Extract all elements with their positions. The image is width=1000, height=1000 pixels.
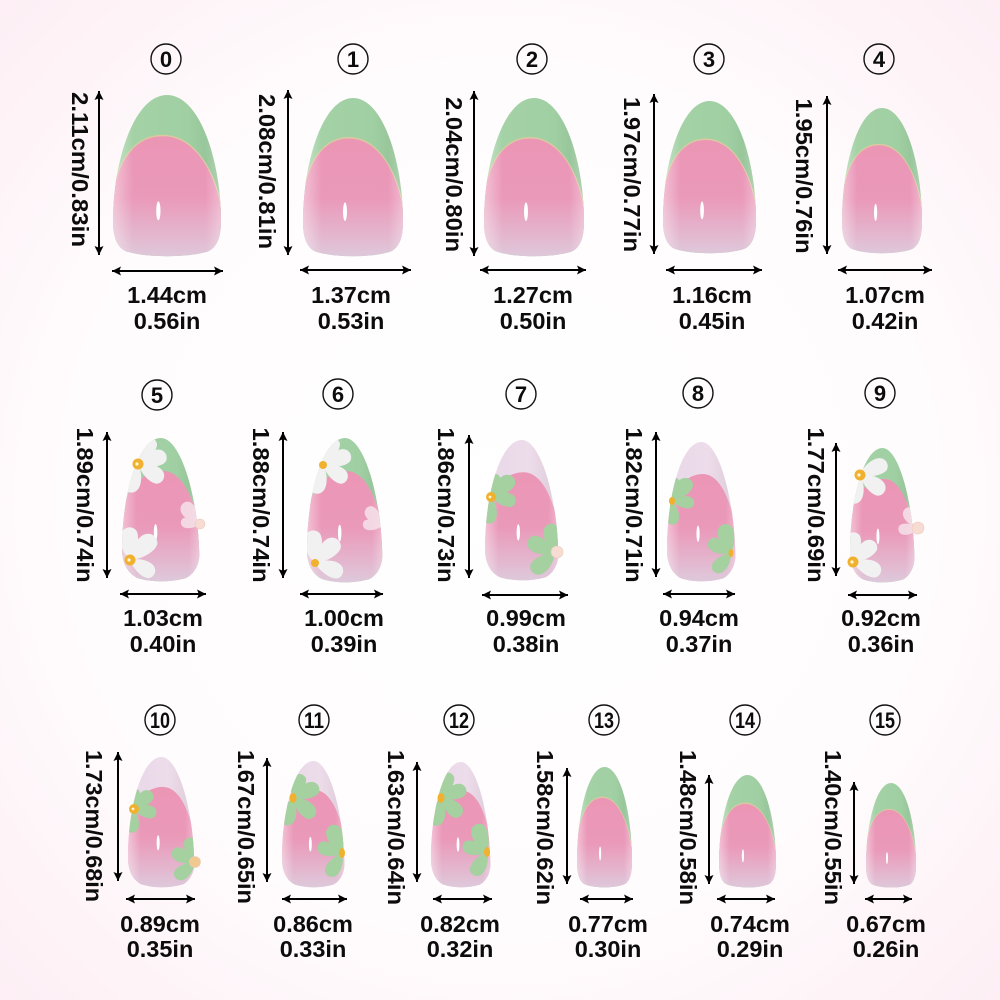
- size 2 number badge: [517, 44, 547, 74]
- size 13 height arrow: [566, 768, 568, 884]
- size 3: [619, 44, 762, 334]
- size 12 height arrow: [416, 762, 418, 882]
- size 14 height arrow: [708, 775, 710, 884]
- size 6 width label: 1.00cm: [304, 605, 384, 631]
- size 14 number badge: 14: [735, 708, 756, 733]
- size 11 width arrow: [282, 898, 347, 900]
- size 5 width label: [123, 605, 203, 657]
- size 9 nail with white flowers: [848, 448, 924, 582]
- size 10 height label: 1.73cm/0.68in: [81, 750, 107, 902]
- size 4 number badge: [864, 44, 894, 74]
- size 13 width arrow: [580, 898, 633, 900]
- size 2 width label: 0.50in: [500, 308, 566, 334]
- size 12: [383, 705, 500, 962]
- size 0: [67, 44, 226, 334]
- size 3 width label: 0.45in: [679, 308, 745, 334]
- size 14 height label: 1.48cm/0.58in: [675, 750, 701, 905]
- size 9 width label: [841, 605, 921, 657]
- size 9 number badge: [865, 378, 895, 408]
- size 10 width label: 0.35in: [127, 936, 193, 962]
- size 6 width label: [304, 605, 384, 657]
- size 3 height arrow: [653, 94, 655, 254]
- size 10 width label: 0.89cm: [120, 911, 200, 937]
- size 14: [675, 705, 790, 962]
- size 5 height arrow: [106, 432, 108, 578]
- size 5 nail with white flowers: [122, 438, 206, 582]
- size 1: [254, 44, 411, 334]
- size 4 width label: [845, 282, 925, 334]
- size 15 width label: 0.67cm: [846, 911, 926, 937]
- size 7 width label: 0.99cm: [486, 605, 566, 631]
- size 1 width arrow: [300, 269, 411, 271]
- size 0 width label: 1.44cm: [127, 282, 207, 308]
- size 0 number badge: 0: [160, 47, 172, 72]
- size 12 number badge: 12: [449, 708, 469, 733]
- size 10 width label: [120, 911, 200, 962]
- size 11 height arrow: [266, 758, 268, 882]
- size 7 height label: 1.86cm/0.73in: [433, 428, 459, 582]
- size 9 width label: 0.92cm: [841, 605, 921, 631]
- size 0 nail: [108, 95, 226, 273]
- size 14 width label: 0.74cm: [710, 911, 790, 937]
- size 0 width label: [127, 282, 207, 334]
- size 11 number badge: [299, 705, 329, 735]
- size 15 number badge: [870, 705, 900, 735]
- size 1 height label: 2.08cm/0.81in: [254, 94, 280, 249]
- size 7 number badge: [506, 379, 536, 409]
- size 15 width arrow: [865, 898, 912, 900]
- size 4 width arrow: [838, 269, 932, 271]
- size 7 number badge: 7: [515, 382, 527, 407]
- size 13: [532, 705, 648, 962]
- size 5 width label: 0.40in: [130, 631, 196, 657]
- size 4 width label: 1.07cm: [845, 282, 925, 308]
- size 4 height arrow: [826, 96, 828, 254]
- size 10 number badge: [145, 705, 175, 735]
- size 4 number badge: 4: [873, 47, 886, 72]
- size 4 height label: 1.95cm/0.76in: [791, 98, 817, 254]
- size 4 width label: 0.42in: [852, 308, 918, 334]
- size 6: [248, 379, 387, 657]
- size 14 number badge: [730, 705, 760, 735]
- size 2 number badge: 2: [526, 47, 538, 72]
- size 9 number badge: 9: [874, 381, 886, 406]
- size 15: [820, 705, 926, 962]
- size 14 nail: [716, 775, 779, 899]
- size 1 number badge: 1: [347, 47, 359, 72]
- size 8 width label: 0.94cm: [659, 605, 739, 631]
- size 0 number badge: [151, 44, 181, 74]
- size 0 width label: 0.56in: [134, 308, 200, 334]
- size 8: [621, 378, 739, 657]
- size 8 width arrow: [663, 593, 735, 595]
- size 2 width label: [493, 282, 573, 334]
- size 6 height label: 1.88cm/0.74in: [248, 428, 274, 582]
- size 6 number badge: 6: [332, 382, 344, 407]
- size 14 width arrow: [717, 898, 775, 900]
- size 6 width arrow: [300, 593, 383, 595]
- size 0 height label: 2.11cm/0.83in: [67, 92, 93, 247]
- size 13 height label: 1.58cm/0.62in: [532, 750, 558, 905]
- size 5 width label: 1.03cm: [123, 605, 203, 631]
- size 2 nail: [479, 98, 589, 273]
- size 11 width label: 0.86cm: [273, 911, 353, 937]
- size 12 height label: 1.63cm/0.64in: [383, 750, 409, 905]
- size 12 width label: 0.32in: [427, 936, 493, 962]
- size 1 width label: [311, 282, 391, 334]
- size 9 height arrow: [835, 443, 837, 576]
- size 13 number badge: [589, 705, 619, 735]
- size 12 number badge: [444, 705, 474, 735]
- size 12 width label: 0.82cm: [420, 911, 500, 937]
- size 13 nail: [574, 767, 635, 900]
- size 3 width arrow: [666, 269, 762, 271]
- size 11 width label: 0.33in: [280, 936, 346, 962]
- size 3 number badge: [694, 44, 724, 74]
- size 10 height arrow: [117, 752, 119, 881]
- size 7: [433, 379, 568, 657]
- size 15 number badge: 15: [875, 708, 895, 733]
- size 7 nail with green flowers: [485, 440, 564, 580]
- size 2 width arrow: [480, 269, 586, 271]
- size 4 nail: [838, 108, 926, 269]
- size 1 height arrow: [287, 90, 289, 255]
- size 8 number badge: 8: [692, 381, 704, 406]
- size 9 height label: 1.77cm/0.69in: [803, 428, 829, 582]
- size 10 width arrow: [126, 898, 195, 900]
- size 2: [441, 44, 589, 334]
- size 5: [72, 380, 206, 657]
- size 7 width arrow: [482, 594, 568, 596]
- size 8 height label: 1.82cm/0.71in: [621, 428, 647, 582]
- size 12 width label: [420, 911, 500, 962]
- size 13 width label: [568, 911, 648, 962]
- size 15 height label: 1.40cm/0.55in: [820, 750, 846, 905]
- size 11 number badge: 11: [304, 708, 324, 733]
- size 1 width label: 0.53in: [318, 308, 384, 334]
- size 5 height label: 1.89cm/0.74in: [72, 428, 98, 582]
- size 7 width label: 0.38in: [493, 631, 559, 657]
- size 10 nail with green flowers: [128, 757, 201, 888]
- size 1 number badge: [338, 44, 368, 74]
- size 1 width label: 1.37cm: [311, 282, 391, 308]
- size 9 width label: 0.36in: [848, 631, 914, 657]
- size 5 number badge: 5: [151, 383, 163, 408]
- size 15 height arrow: [853, 782, 855, 884]
- size 1 nail: [298, 98, 408, 273]
- size 12 width arrow: [433, 898, 492, 900]
- size 0 width arrow: [112, 270, 223, 272]
- size 6 width label: 0.39in: [311, 631, 377, 657]
- size 11: [233, 705, 353, 962]
- size 9: [803, 378, 924, 657]
- size 0 height arrow: [98, 91, 100, 255]
- size 3 number badge: 3: [703, 47, 715, 72]
- size 11 width label: [273, 911, 353, 962]
- size 13 width label: 0.77cm: [568, 911, 648, 937]
- size 15 nail: [864, 783, 918, 898]
- size 9 width arrow: [848, 594, 917, 596]
- size 5 number badge: [142, 380, 172, 410]
- size 14 width label: 0.29in: [717, 936, 783, 962]
- size 7 height arrow: [468, 435, 470, 578]
- size 5 width arrow: [120, 593, 206, 595]
- size 4: [791, 44, 932, 334]
- size 2 width label: 1.27cm: [493, 282, 573, 308]
- size 15 width label: 0.26in: [853, 936, 919, 962]
- size 2 height label: 2.04cm/0.80in: [441, 97, 467, 252]
- size 8 width label: 0.37in: [666, 631, 732, 657]
- size 15 width label: [846, 911, 926, 962]
- size 3 nail: [658, 101, 761, 269]
- size 3 width label: [672, 282, 752, 334]
- size 7 width label: [486, 605, 566, 657]
- size 10 number badge: 10: [150, 708, 170, 733]
- size 8 number badge: [683, 378, 713, 408]
- size 3 width label: 1.16cm: [672, 282, 752, 308]
- size 13 number badge: 13: [594, 708, 614, 733]
- size 6 height arrow: [282, 432, 284, 578]
- size 8 width label: [659, 605, 739, 657]
- size 11 height label: 1.67cm/0.65in: [233, 750, 259, 904]
- size 10: [81, 705, 202, 962]
- size 3 height label: 1.97cm/0.77in: [619, 97, 645, 252]
- size 6 number badge: [323, 379, 353, 409]
- size 14 width label: [710, 911, 790, 962]
- size 13 width label: 0.30in: [575, 936, 641, 962]
- size 8 height arrow: [655, 432, 657, 577]
- size 12 nail with green flowers: [431, 762, 490, 888]
- size 11 nail with green flowers: [282, 761, 345, 888]
- size 2 height arrow: [473, 91, 475, 256]
- size 6 nail with white flowers: [307, 438, 382, 582]
- size 8 nail with green flowers: [667, 442, 736, 582]
